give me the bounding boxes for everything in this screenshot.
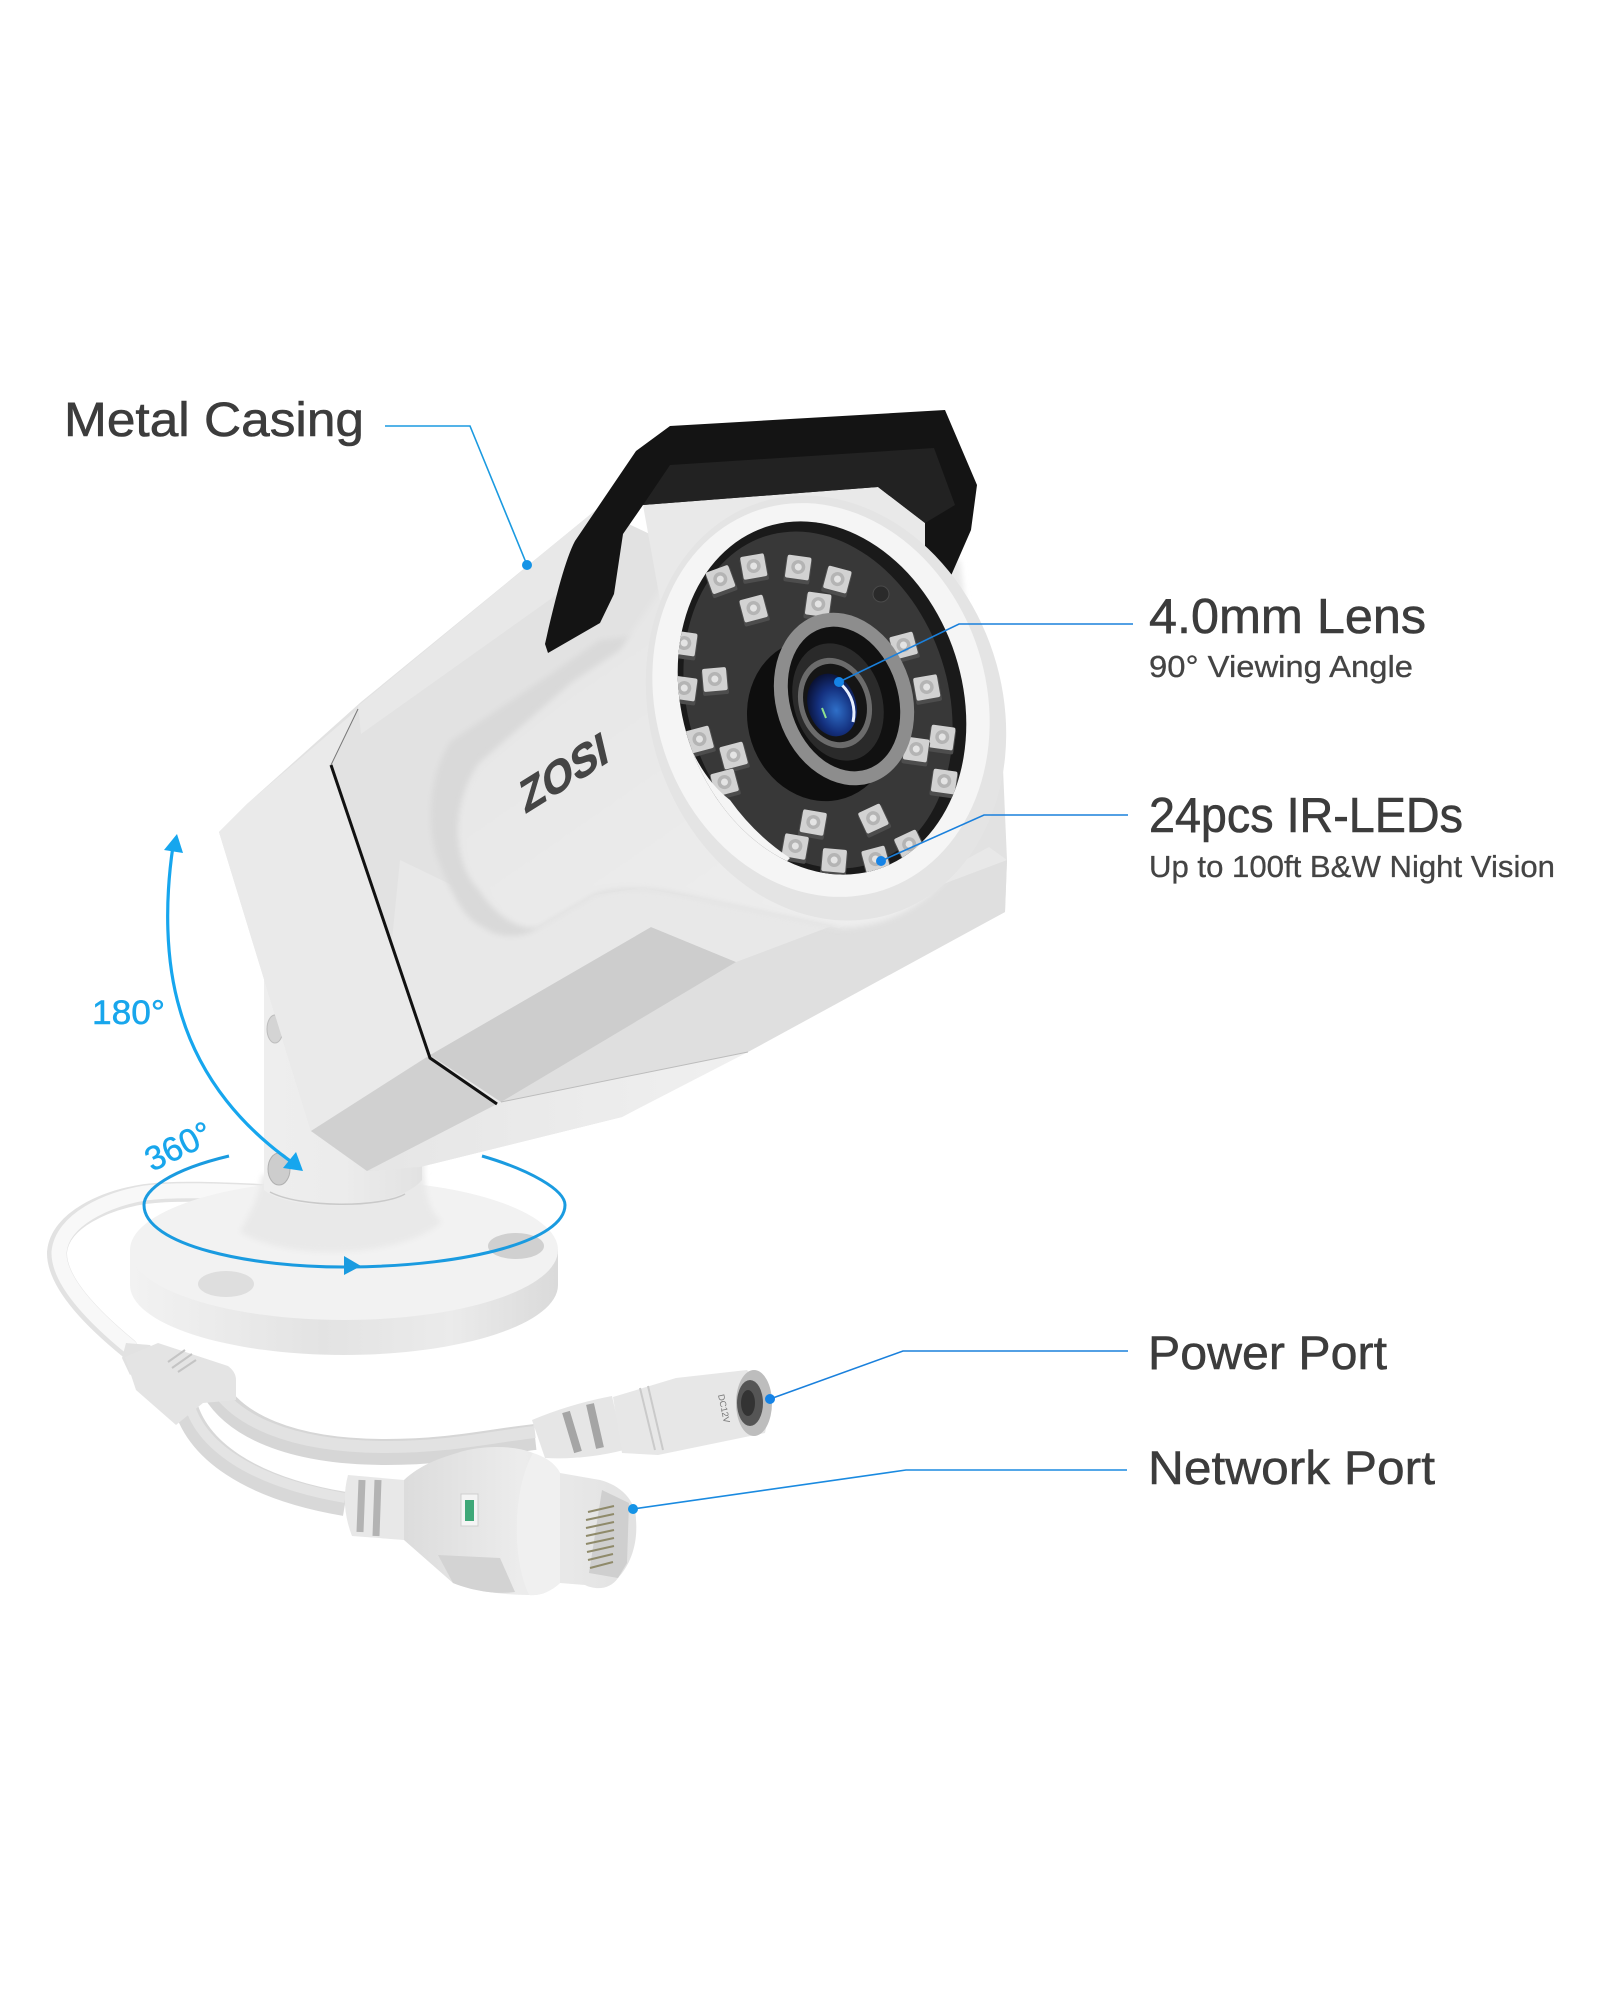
tilt arrow 180	[164, 834, 303, 1171]
callout: lens: 4.0mm Lens	[1149, 590, 1426, 644]
visor inner face	[643, 448, 955, 523]
callout: lens: 90° Viewing Angle	[1149, 649, 1413, 684]
upper cable	[212, 1385, 535, 1452]
lens mount	[726, 620, 914, 820]
rear section	[219, 709, 430, 1131]
lens ring and faceplate	[652, 504, 1006, 920]
network connector strain relief	[345, 1475, 404, 1540]
IR LEDs	[678, 553, 958, 875]
underside	[311, 1052, 748, 1171]
callout: network port: Network Port	[1148, 1441, 1435, 1494]
base disc side	[130, 1250, 558, 1355]
outer ring	[592, 448, 1060, 968]
callout: power port: Power Port	[1148, 1326, 1387, 1379]
brand logo: ZOSI	[516, 721, 612, 824]
power connector strain relief	[532, 1396, 624, 1458]
body silhouette	[219, 509, 1007, 1171]
mount: base disc and stem	[130, 960, 558, 1355]
top bevel strip	[358, 509, 625, 734]
camera body	[219, 509, 1007, 1171]
white surface under visor	[643, 487, 925, 640]
mounting hole left	[198, 1271, 254, 1297]
label: 180 degrees: 180°	[92, 994, 165, 1032]
IR sensor	[873, 586, 889, 602]
status light	[461, 1494, 478, 1526]
stem	[264, 960, 422, 1205]
lens glass	[799, 667, 865, 743]
lower side facet	[501, 860, 1007, 1102]
lens barrel ring	[787, 648, 883, 758]
callout: IR LEDs	[876, 789, 1555, 884]
visor outer	[545, 410, 977, 653]
Y splitter body	[125, 1343, 236, 1425]
power connector marking: DC12V	[716, 1393, 732, 1424]
screw lower	[268, 1153, 290, 1185]
callout: metal casing: Metal Casing	[64, 394, 364, 447]
rear seam	[331, 765, 497, 1104]
cable loop from camera to connector	[57, 1191, 262, 1348]
barrel housing	[458, 560, 989, 928]
cable assembly	[122, 1343, 772, 1595]
power connector end	[736, 1370, 772, 1436]
RJ45 pins	[586, 1506, 614, 1568]
ring lip covering lower-left of faceplate	[692, 750, 790, 861]
callout: IR LEDs: Up to 100ft B&W Night Vision	[1149, 849, 1555, 884]
callout: metal casing	[64, 394, 532, 570]
rear lower facet	[311, 1055, 497, 1171]
stem flare	[240, 1160, 442, 1252]
hairline	[501, 1052, 748, 1102]
callout: power port	[765, 1326, 1387, 1404]
network connector body	[404, 1447, 636, 1595]
power connector body	[613, 1370, 772, 1455]
shelf below barrel	[392, 847, 1007, 1055]
Y splitter collar	[122, 1343, 158, 1375]
dark faceplate	[633, 484, 1011, 912]
barrel recess shading	[431, 620, 960, 936]
base disc top	[130, 1180, 558, 1320]
lower cable	[184, 1400, 345, 1504]
visor	[545, 410, 977, 653]
grey facet	[430, 927, 736, 1102]
grey bezel	[752, 594, 936, 804]
RJ45 socket	[589, 1490, 629, 1578]
callout: lens	[834, 590, 1426, 687]
mounting hole right	[488, 1233, 544, 1259]
label: 360 degrees: 360°	[139, 1114, 218, 1179]
callout: network port	[628, 1441, 1435, 1514]
pan arrow 360	[144, 1156, 565, 1275]
callout: IR LEDs: 24pcs IR-LEDs	[1149, 789, 1463, 843]
screw upper	[267, 1015, 283, 1043]
